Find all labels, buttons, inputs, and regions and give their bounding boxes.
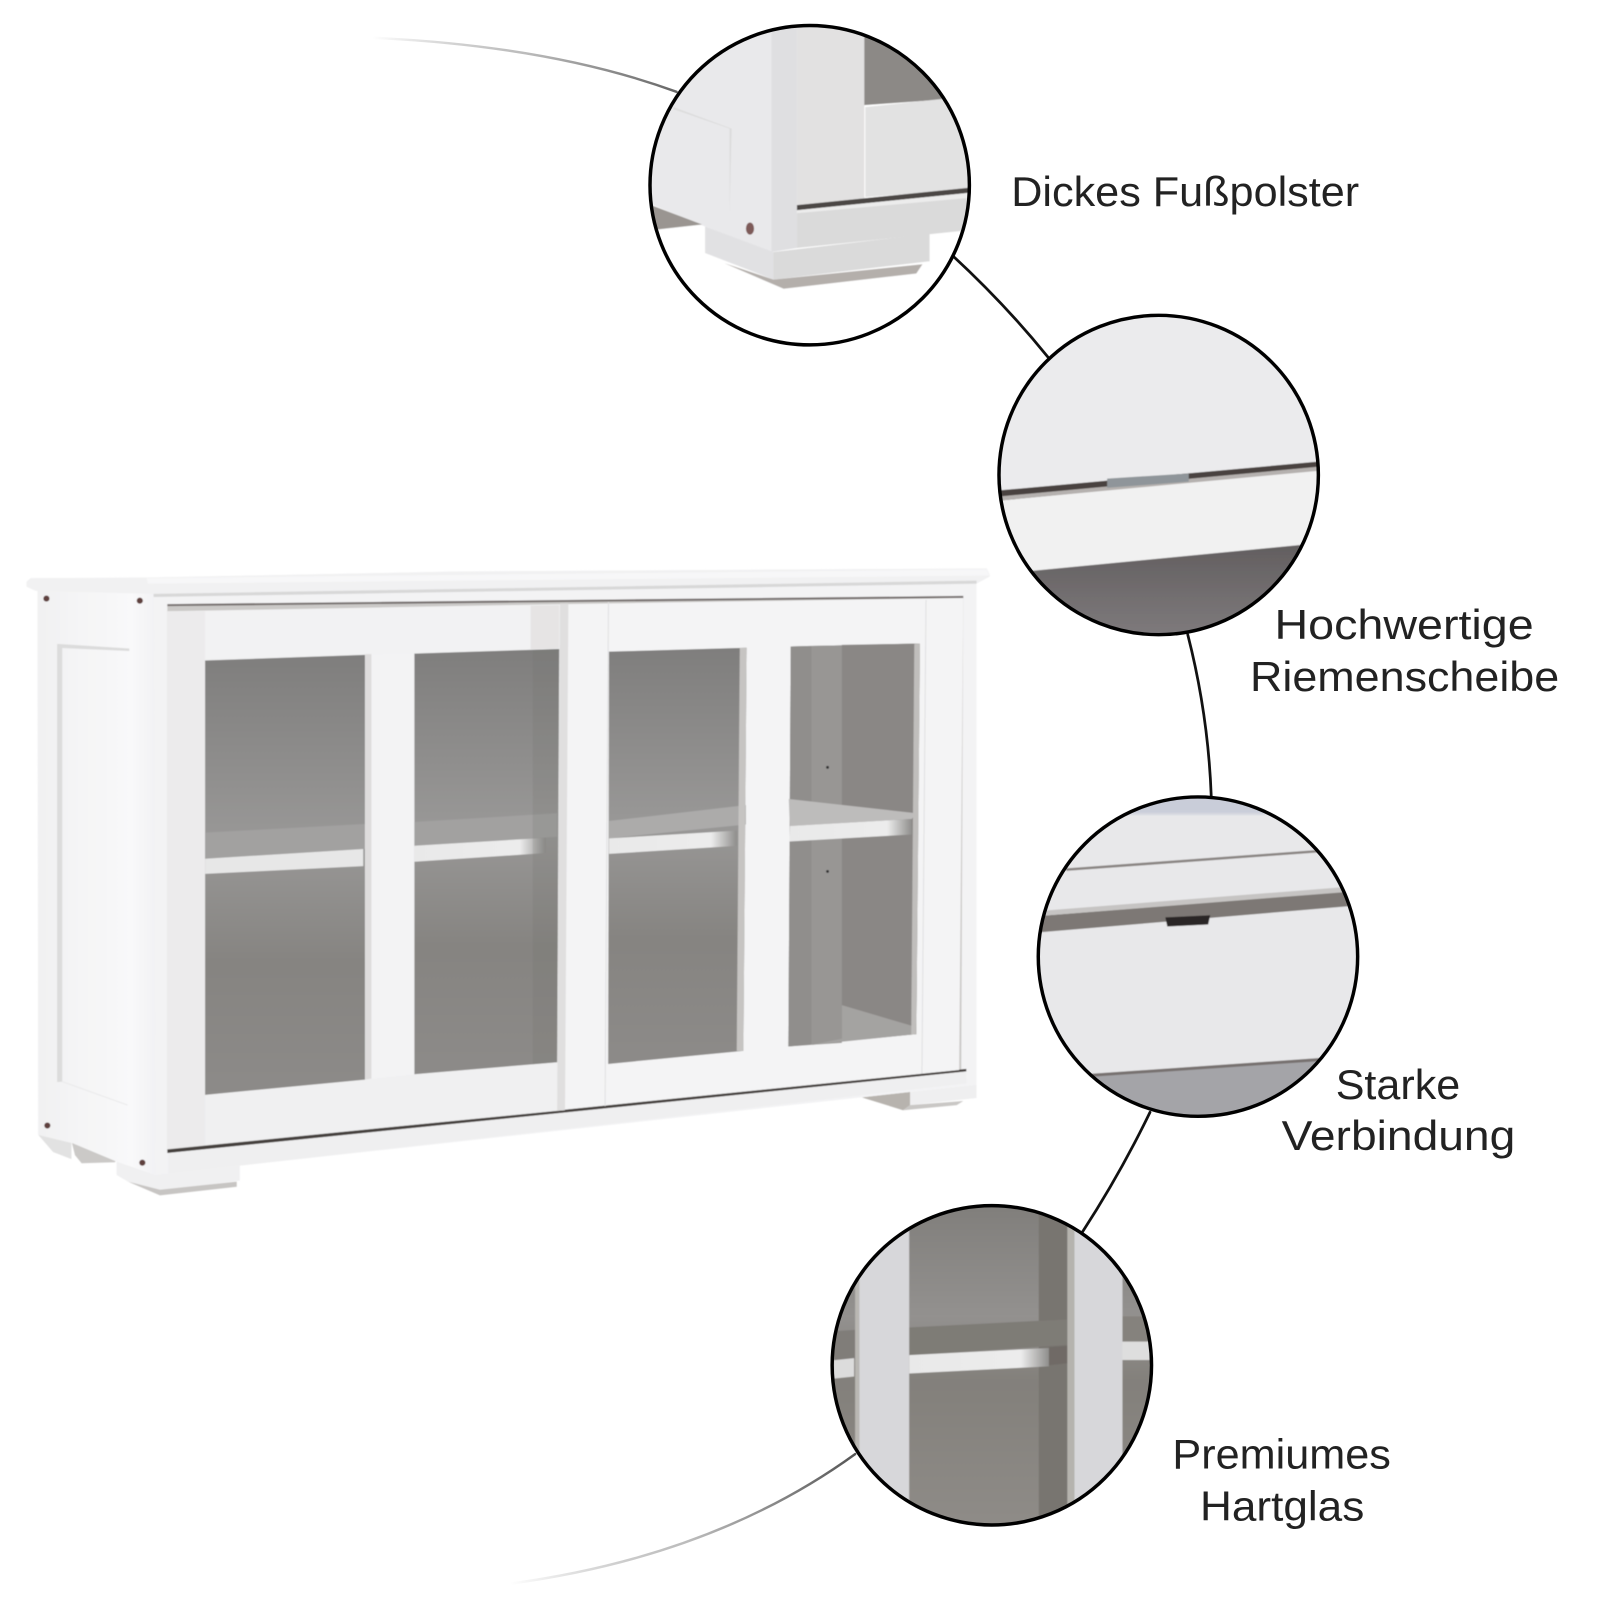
right door right glass pane [788, 643, 920, 1047]
left door shelf right [414, 813, 557, 862]
left sliding door [167, 604, 563, 1149]
cabinet top board [27, 568, 990, 597]
shadow column [1039, 1202, 1067, 1529]
right white bar [1074, 1230, 1124, 1500]
right door shelf left [609, 805, 746, 854]
shelf top [910, 1321, 1039, 1354]
door stile [797, 20, 864, 214]
shelf strip [909, 1348, 1049, 1373]
detail circle: thick foot pad [643, 20, 980, 357]
detail circle: pulley [995, 311, 1322, 638]
label: Hochwertige Riemenscheibe: Hochwertige [1274, 602, 1534, 648]
corner face [771, 20, 797, 252]
right foot [862, 1085, 977, 1110]
left white bar [858, 1230, 910, 1500]
rail slot line [167, 1069, 966, 1153]
side panel recess [57, 644, 129, 1105]
label: Premiumes Hartglas: Premiumes [1172, 1431, 1391, 1477]
right shelf strip [1121, 1342, 1155, 1360]
track band [1036, 890, 1362, 933]
foot front [773, 234, 930, 280]
sideboard cabinet photo illustration [27, 568, 990, 1195]
detail circle: strong connection [1036, 794, 1362, 1120]
label: Premiumes Hartglas: Hartglas [1200, 1483, 1364, 1529]
foot underside [724, 263, 922, 289]
right door joint lines [605, 602, 609, 1106]
left door left glass pane [205, 655, 365, 1095]
label: Starke Verbindung: Verbindung [1282, 1113, 1515, 1159]
right door left edge [557, 604, 568, 1111]
side panel [37, 588, 155, 1175]
lower band [995, 465, 1322, 578]
shelf peg holes [826, 766, 829, 873]
label: Starke Verbindung: Starke [1336, 1062, 1460, 1108]
label: Hochwertige Riemenscheibe: Riemenscheibe [1250, 654, 1559, 700]
dark track [995, 461, 1322, 501]
lower gray area [1094, 1060, 1316, 1115]
label: Premiumes Hartglas [1172, 1431, 1391, 1529]
foot side [705, 227, 773, 280]
left door top rail [205, 605, 559, 659]
base band [797, 197, 980, 248]
label: Starke Verbindung [1282, 1062, 1515, 1159]
bluish top highlight [1129, 798, 1265, 815]
connector lines between detail circles [372, 38, 1211, 1584]
thin line [1066, 850, 1317, 871]
front left foot [117, 1155, 240, 1195]
door rail [865, 98, 968, 197]
dark track line [797, 187, 980, 210]
label: Hochwertige Riemenscheibe [1250, 602, 1559, 700]
gray gap [651, 205, 702, 230]
dark lower area [1032, 544, 1300, 633]
right sliding door [557, 598, 963, 1111]
side panel crop [652, 32, 772, 251]
interior wall lighter panel [842, 643, 919, 1039]
rear left foot [38, 1135, 117, 1163]
left door shelf left [205, 824, 365, 874]
slot [1165, 915, 1210, 927]
left shelf strip [834, 1358, 854, 1379]
base strip [168, 1070, 966, 1173]
glass edges [737, 648, 747, 1051]
glass window [864, 37, 942, 106]
right door shelf right [789, 799, 916, 842]
pulley gap [1107, 473, 1189, 488]
left door mullion [365, 653, 414, 1080]
front frame [154, 578, 977, 1175]
left door stile shading [167, 611, 205, 1149]
interior gap [167, 597, 963, 1151]
screw [746, 222, 754, 235]
label: Dickes Fußpolster: Dickes Fußpolster [1011, 169, 1359, 215]
glass reflection band [533, 649, 559, 1064]
left door right glass pane [414, 649, 559, 1074]
right door left glass pane [608, 648, 747, 1064]
screws [43, 596, 145, 1166]
detail circle: tempered glass [829, 1202, 1155, 1529]
